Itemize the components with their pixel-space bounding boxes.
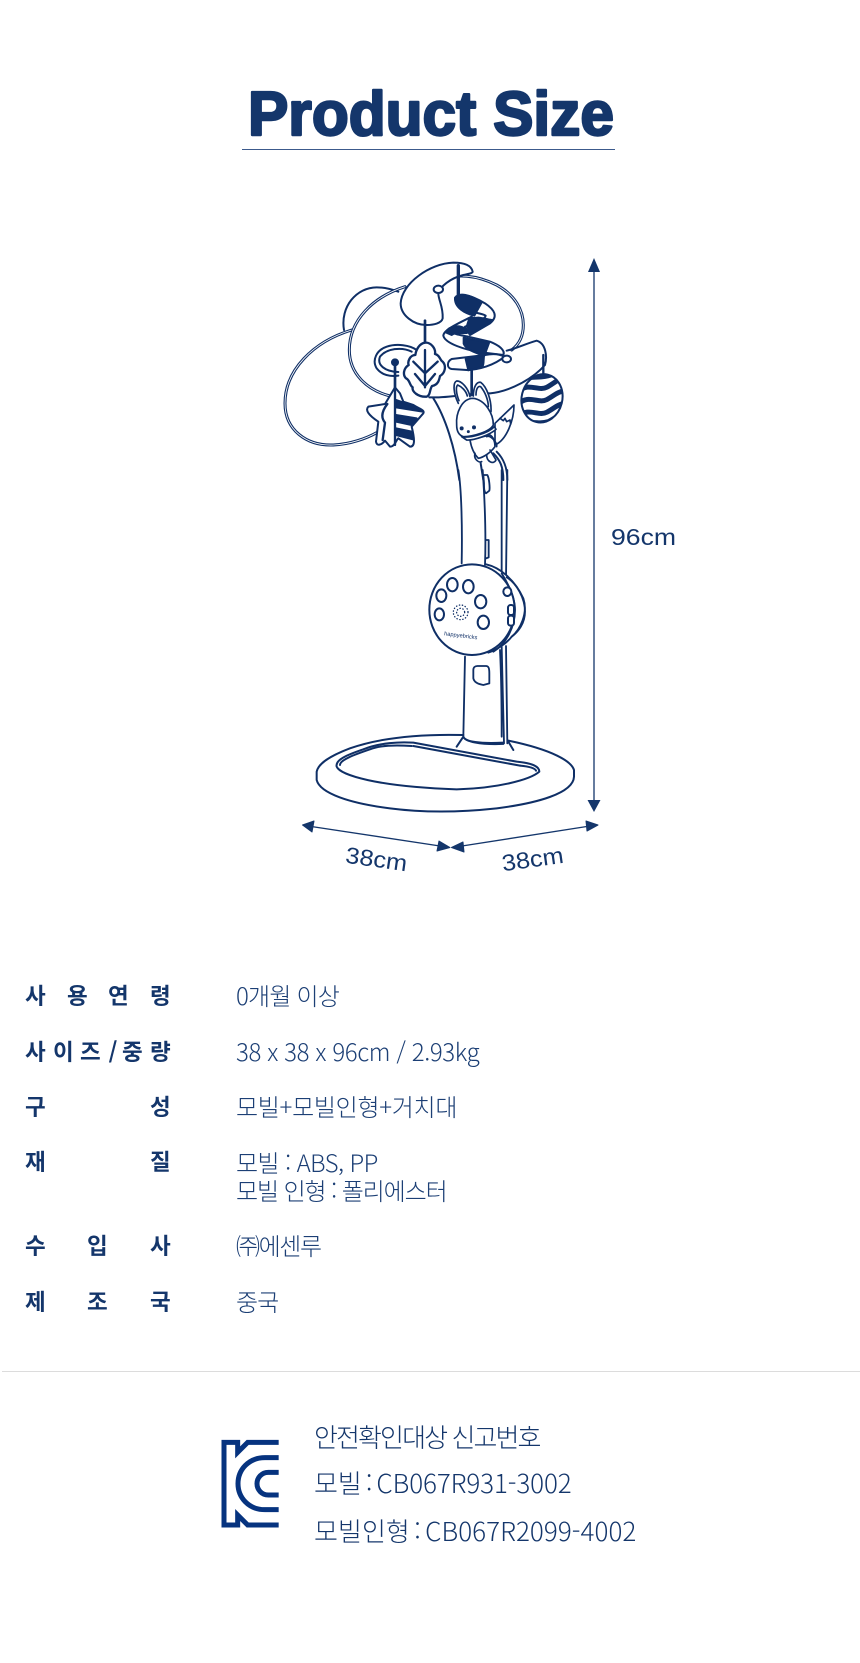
row label: importer: 입 bbox=[87, 1229, 108, 1261]
safety certification text bbox=[314, 1418, 636, 1549]
upper pole bbox=[433, 398, 459, 480]
width dimension arrow left bbox=[302, 821, 450, 851]
row value: country: 중국 bbox=[236, 1283, 278, 1318]
row label: importer: 수 bbox=[25, 1229, 46, 1261]
mushroom ring bbox=[375, 345, 417, 376]
certification heading: 안전확인대상 신고번호 bbox=[314, 1418, 540, 1455]
row label: material: 재 bbox=[25, 1145, 46, 1177]
row label: size bbox=[25, 1035, 171, 1067]
speaker brand: happyebricks bbox=[444, 631, 478, 641]
stand pole and speaker bbox=[429, 470, 525, 744]
row label: country: 조 bbox=[87, 1285, 108, 1317]
row label: material bbox=[25, 1145, 171, 1177]
row value: material: 모빌 : ABS, PP bbox=[236, 1144, 378, 1179]
row label: importer: 사 bbox=[150, 1229, 171, 1261]
speaker front bbox=[429, 564, 515, 655]
centre canopy bbox=[349, 276, 546, 397]
row label: components: 성 bbox=[150, 1090, 171, 1122]
certification: mobile: 모빌 : CB067R931-3002 bbox=[314, 1464, 572, 1501]
row label: size: 중 bbox=[122, 1035, 143, 1067]
mobile canopy and toys bbox=[285, 263, 568, 480]
row label: age: 용 bbox=[67, 979, 88, 1011]
row label: country: 국 bbox=[150, 1285, 171, 1317]
row value: material: 모빌 인형 : 폴리에스터 bbox=[236, 1172, 447, 1207]
spiral toy bbox=[443, 266, 511, 370]
row value: age: 0개월 이상 bbox=[236, 977, 339, 1012]
speaker grille bbox=[453, 605, 468, 620]
back ellipse left bbox=[285, 330, 377, 445]
lower pole bbox=[463, 650, 503, 744]
width label left: 38cm bbox=[344, 842, 409, 876]
row label: size: 사 bbox=[25, 1035, 46, 1067]
row label: age bbox=[25, 979, 171, 1011]
row label: size: / bbox=[109, 1035, 117, 1067]
moon arm bbox=[401, 263, 473, 325]
icon: KC mark bbox=[222, 1440, 279, 1528]
pole tabs bbox=[483, 475, 490, 558]
row label: size: 이 bbox=[53, 1035, 74, 1067]
row label: size: 즈 bbox=[80, 1035, 101, 1067]
ball toy waves bbox=[522, 375, 562, 422]
row value: material bbox=[236, 1144, 447, 1207]
row label: age: 령 bbox=[150, 979, 171, 1011]
row label: components: 구 bbox=[25, 1090, 46, 1122]
certification: plush: 모빌인형 : CB067R2099-4002 bbox=[314, 1512, 636, 1549]
speaker buttons bbox=[435, 578, 514, 629]
base bbox=[317, 735, 574, 812]
row value: importer: ㈜에센루 bbox=[236, 1227, 321, 1262]
height label: 96cm bbox=[611, 524, 676, 550]
row label: size: 량 bbox=[150, 1035, 171, 1067]
row label: country bbox=[25, 1285, 171, 1317]
row label: components bbox=[25, 1090, 171, 1122]
depth dimension arrow right bbox=[452, 821, 598, 852]
row value: size: 38 x 38 x 96cm / 2.93kg bbox=[236, 1033, 479, 1068]
depth label right: 38cm bbox=[500, 842, 565, 876]
fox plush bbox=[454, 370, 514, 462]
row label: importer bbox=[25, 1229, 171, 1261]
back pole bbox=[502, 470, 507, 743]
row value: components: 모빌+모빌인형+거치대 bbox=[236, 1088, 457, 1123]
row label: country: 제 bbox=[25, 1285, 46, 1317]
back small circle bbox=[343, 287, 398, 330]
product illustration with dimensions bbox=[284, 258, 676, 876]
row label: material: 질 bbox=[150, 1145, 171, 1177]
row label: age: 연 bbox=[108, 979, 129, 1011]
speaker back bbox=[486, 564, 525, 653]
front pole bbox=[458, 470, 485, 565]
star toy bbox=[367, 359, 424, 447]
row label: age: 사 bbox=[25, 979, 46, 1011]
title: Product Size: Product Size bbox=[248, 80, 614, 149]
ball toy bbox=[516, 355, 568, 427]
height dimension arrow bbox=[588, 258, 600, 812]
spec table bbox=[25, 977, 480, 1318]
leaf toy bbox=[404, 321, 445, 397]
lower tab bbox=[473, 666, 489, 685]
